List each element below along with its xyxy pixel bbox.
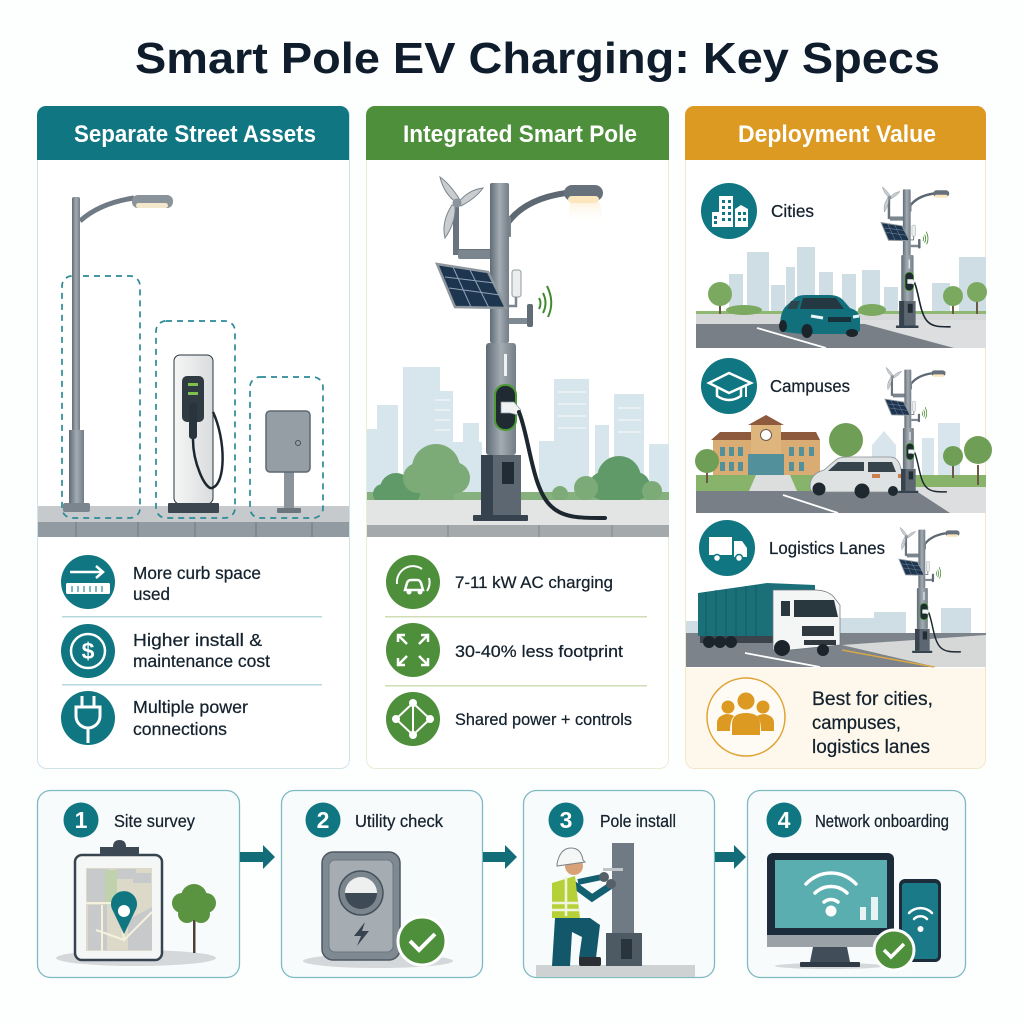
trees — [695, 423, 992, 485]
icon: utility cabinet — [266, 411, 310, 513]
scene: cities — [696, 183, 987, 348]
number badge: 2 — [317, 807, 329, 833]
item: multiple connections — [61, 691, 248, 745]
label: Network onboarding — [815, 811, 949, 831]
panel: separate street assets — [37, 106, 350, 768]
road — [686, 633, 986, 667]
sidewalk — [38, 506, 349, 537]
item: charging — [386, 555, 613, 609]
icon: monitor and phone online — [767, 853, 941, 970]
heading: deployment value: Deployment Value — [738, 121, 936, 148]
number badge: 3 — [560, 807, 572, 833]
icon: city buildings — [701, 183, 757, 239]
icon: plug — [61, 691, 115, 745]
text: Higher install & — [133, 630, 262, 650]
heading: separate street assets: Separate Street Assets — [74, 121, 316, 148]
mini smart pole — [899, 527, 960, 653]
label: Utility check — [355, 811, 443, 831]
white hatchback — [810, 457, 905, 498]
panel: deployment value — [685, 106, 992, 768]
skyline — [872, 423, 960, 478]
step 4: network onboarding — [748, 790, 966, 978]
ground and road — [696, 311, 986, 348]
arrow: step 3 to 4 — [715, 845, 746, 869]
trees — [708, 282, 987, 316]
icon: dollar — [61, 624, 115, 678]
text: maintenance cost — [133, 651, 270, 671]
dashed boundary: street light — [62, 276, 140, 518]
icon: people — [707, 678, 785, 756]
icon: worker installing pole — [536, 843, 695, 977]
icon: clipboard map and tree — [56, 840, 216, 966]
text: used — [133, 584, 170, 604]
item: more curb space — [61, 555, 261, 609]
heading: deployment value — [685, 106, 986, 160]
icon: graduation cap — [701, 358, 757, 414]
label: Campuses — [770, 376, 850, 396]
label: Pole install — [600, 811, 676, 831]
scene: campuses — [695, 358, 992, 513]
distant buildings — [686, 608, 971, 635]
mini smart pole — [885, 367, 946, 493]
callout: best for — [686, 668, 985, 768]
item: higher cost — [61, 624, 270, 678]
title: Smart Pole EV Charging: Key Specs — [135, 34, 940, 83]
text: More curb space — [133, 563, 261, 583]
number badge — [766, 802, 802, 838]
item: shared power — [386, 692, 632, 746]
dashed boundary: charger — [156, 321, 235, 518]
text: 30-40% less footprint — [455, 642, 623, 661]
number badge — [64, 802, 98, 838]
sidewalk — [367, 500, 669, 537]
number badge: 4 — [778, 807, 791, 833]
label: Cities — [771, 201, 814, 221]
label: Site survey — [114, 811, 195, 831]
text: Multiple power — [133, 697, 248, 717]
icon: truck — [699, 520, 755, 576]
icon: EV charger — [168, 355, 223, 513]
trees and shrubs — [367, 444, 669, 505]
text: Shared power + controls — [455, 710, 632, 729]
skyline — [729, 247, 986, 314]
text: connections — [133, 719, 227, 739]
heading: separate street assets — [37, 106, 349, 160]
icon: curb space — [61, 555, 115, 609]
city skyline — [367, 367, 669, 500]
heading: integrated smart pole: Integrated Smart Pole — [403, 121, 637, 148]
dashed boundary: cabinet — [250, 377, 323, 518]
campus building — [711, 415, 820, 475]
number badge — [306, 802, 340, 838]
number badge: 1 — [75, 807, 88, 833]
panel: integrated smart pole — [366, 106, 669, 768]
heading: integrated smart pole — [366, 106, 669, 160]
label: Logistics Lanes — [769, 538, 885, 558]
scene: logistics lanes — [686, 520, 986, 667]
mini smart pole — [881, 187, 950, 328]
text: logistics lanes — [812, 737, 930, 758]
text: 7-11 kW AC charging — [455, 573, 613, 592]
number badge — [548, 802, 584, 838]
text: campuses, — [812, 713, 901, 734]
text: Best for cities, — [812, 689, 933, 710]
ground and road — [696, 475, 986, 513]
item: footprint — [386, 623, 623, 677]
icon: reduce footprint — [386, 623, 440, 677]
icon: car charging — [386, 555, 440, 609]
lamp glow — [568, 203, 604, 224]
step 3: pole install — [524, 790, 714, 978]
step 2: utility check — [282, 790, 482, 978]
arrow: step 2 to 3 — [483, 845, 517, 869]
icon: network nodes — [386, 692, 440, 746]
icon: street light — [63, 195, 173, 512]
arrow: step 1 to 2 — [240, 845, 275, 869]
icon: integrated smart pole — [437, 177, 605, 521]
truck — [698, 583, 840, 656]
icon: dollar: $ — [82, 638, 95, 664]
teal car — [779, 295, 860, 338]
icon: utility meter with check — [303, 852, 453, 968]
step 1: site survey — [38, 790, 240, 978]
